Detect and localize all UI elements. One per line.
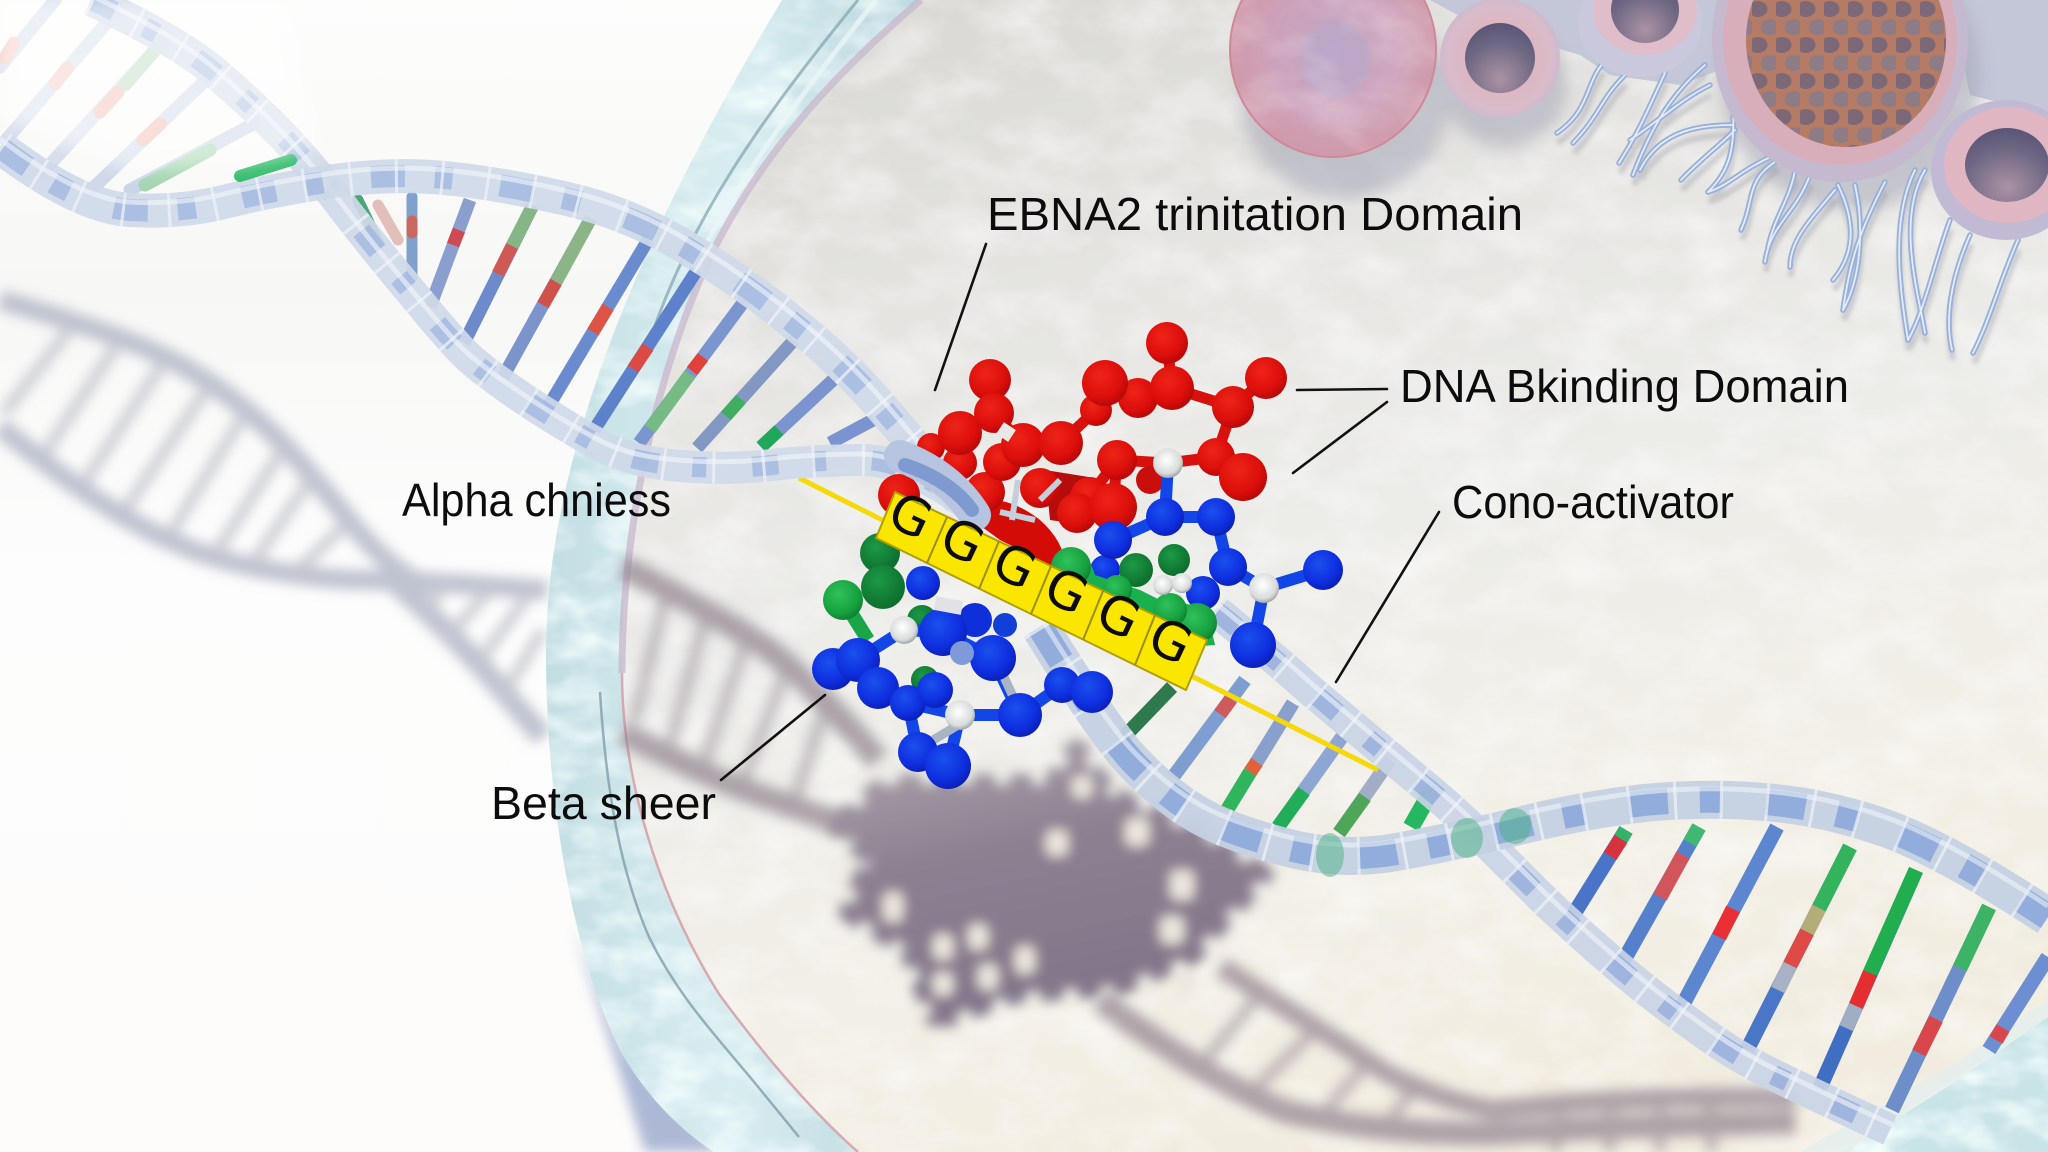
second lobe rungs: [430, 200, 873, 448]
G letters: G: [1035, 556, 1097, 628]
shadow of the protein inside the cell: [840, 750, 1262, 1015]
cell membrane, lower right corner: [1800, 1000, 2048, 1152]
G letters: G: [879, 481, 941, 553]
upper-left faded lobe rungs: [0, 0, 255, 190]
backbone strand lower right: [1215, 605, 1893, 1130]
cell organelles, top right: [1230, 0, 2048, 363]
green rung at first crossing: [240, 160, 291, 176]
yellow G tile strip: [876, 481, 1207, 690]
label: Alpha chniess: Alpha chniess: [402, 474, 671, 526]
blue domain right: [1090, 448, 1343, 668]
G letters: G: [983, 531, 1045, 603]
pink disk: [1230, 0, 1436, 157]
green domain: [823, 533, 1217, 694]
tentacles: [1557, 63, 2018, 353]
ring organelle: [1440, 0, 1560, 118]
background shadow of DNA, left side: [0, 300, 547, 737]
strand passing over the protein: [900, 456, 975, 515]
tentacle highlights: [1557, 63, 2018, 353]
G letters: G: [1139, 606, 1201, 678]
large honeycomb organelle: [1712, 0, 1968, 182]
tentacle shadows: [1558, 73, 2019, 363]
cell membrane, left arc: [546, 0, 921, 1152]
panel: cell interior: [622, 0, 2048, 1152]
G letters: [879, 481, 1201, 678]
label: EBNA2 trinitation Domain: EBNA2 trinitation Domain: [987, 188, 1523, 240]
label: DNA Bkinding Domain: DNA Bkinding Domain: [1400, 360, 1849, 412]
organelle body behind rings: [1430, 0, 2048, 115]
upper ring organelle: [1578, 0, 1702, 77]
label: Beta sheer: Beta sheer: [491, 777, 716, 829]
red domain: [878, 322, 1287, 572]
label: Cono-activator: Cono-activator: [1452, 476, 1734, 528]
G letters: G: [1087, 581, 1149, 653]
grey backbone inside protein: [1000, 480, 1060, 520]
yellow strand: [799, 478, 1378, 770]
leader lines: [721, 244, 1439, 780]
G letters: G: [931, 506, 993, 578]
fade over the upper-left lobe: [0, 0, 322, 172]
shadow cast by the membrane on the background: [572, 925, 720, 1152]
backbone strand lower: [1040, 616, 2048, 917]
third lobe rungs: [1124, 680, 1436, 833]
crossing rungs: [358, 197, 412, 277]
shadow of DNA inside the cell: [622, 566, 1795, 1152]
fourth lobe rungs: [1572, 827, 2048, 1110]
backbone strand behind: [88, 0, 975, 510]
EBNA2 protein: [812, 322, 1343, 789]
blue domain lower: [812, 566, 1113, 789]
backbone strand front: [0, 139, 960, 500]
organelle shadows: [1240, 0, 1980, 210]
right ring organelle: [1931, 100, 2048, 240]
green tint at crossing: [1316, 808, 1531, 877]
